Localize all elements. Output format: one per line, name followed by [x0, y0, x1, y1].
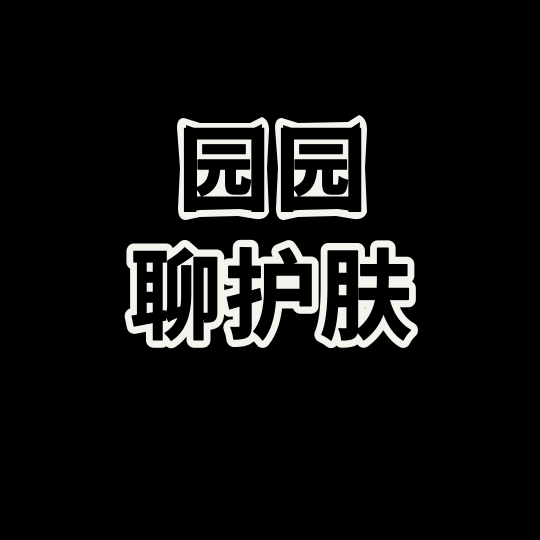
- frame: left character: [186, 124, 262, 212]
- title line two: 聊护肤: 肤: [320, 244, 412, 353]
- title line one: 园园: [177, 115, 367, 223]
- character 园 right: 园: [275, 121, 367, 223]
- title line two: 聊护肤: 护: [225, 244, 317, 353]
- frame: right character: [283, 122, 360, 212]
- sticker backing: left character: [177, 117, 269, 220]
- title line two: 聊护肤: 肤: [320, 244, 412, 353]
- title line two: 聊护肤: 聊: [130, 244, 222, 353]
- title line two: 聊护肤: [130, 244, 412, 353]
- title line two: 聊护肤: 聊: [130, 244, 222, 353]
- sticker backing: right character: [275, 115, 367, 220]
- title line two: 聊护肤: 护: [225, 244, 317, 353]
- character 园 left: 园: [178, 121, 270, 223]
